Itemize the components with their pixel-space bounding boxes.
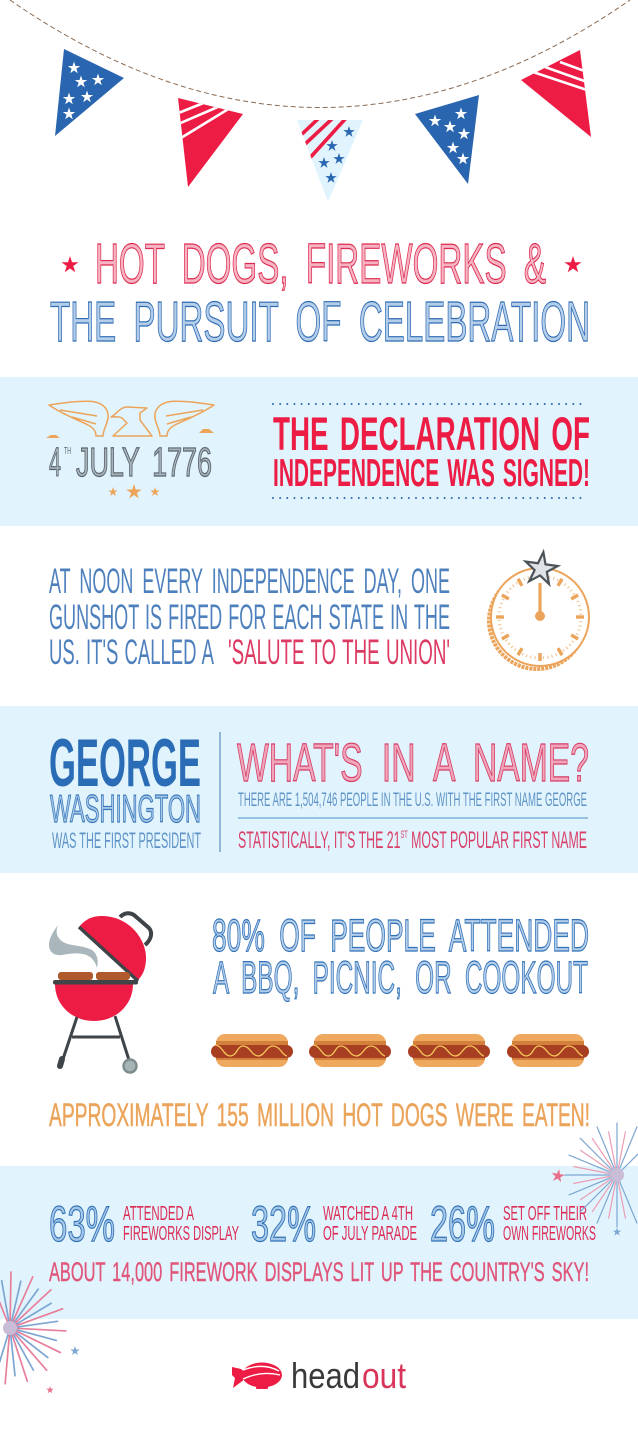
stat: 32%: [251, 1196, 417, 1252]
stat: 63%: FIREWORKS DISPLAY: [123, 1223, 239, 1245]
george washington text: GEORGE: [49, 725, 201, 801]
stars: [108, 484, 160, 498]
bunting string: [10, 0, 630, 108]
icon: grill: [49, 913, 151, 1072]
icon: hot dog 3: [408, 1034, 490, 1067]
title: [50, 232, 590, 354]
decorative stars: [46, 1168, 621, 1393]
stat: 63%: ATTENDED A: [123, 1203, 194, 1225]
stat: 26%: 26%: [430, 1196, 495, 1252]
stat: 32%: 32%: [251, 1196, 316, 1252]
text: noon gunshot fact: [49, 562, 450, 672]
date: 4: [49, 439, 61, 485]
icon: hot dog 1: [211, 1034, 293, 1067]
george washington text: [49, 725, 201, 853]
what's in a name text: ST: [400, 829, 408, 841]
text: noon gunshot fact: US. IT'S CALLED A: [49, 633, 214, 672]
panel: george washington: [0, 706, 638, 873]
flag: blue with stars right: [415, 95, 479, 184]
text: noon gunshot fact: 'SALUTE TO THE UNION': [228, 633, 450, 672]
george washington text: WASHINGTON: [50, 788, 201, 831]
icon: hot dog 4: [507, 1034, 589, 1067]
what's in a name text: STATISTICALLY, IT'S THE 21: [238, 827, 554, 854]
stat: 32%: OF JULY PARADE: [323, 1223, 417, 1245]
icon: clock with star: [489, 550, 589, 669]
what's in a name text: [237, 733, 589, 854]
stat: 26%: [430, 1196, 596, 1252]
icon: blimp: [232, 1362, 282, 1389]
icon: hot dog 2: [309, 1034, 391, 1067]
logo: headout: head: [291, 1355, 360, 1396]
date: TH: [64, 446, 71, 457]
date: JULY 1776: [76, 439, 212, 485]
stat: 32%: WATCHED A 4TH: [323, 1203, 413, 1225]
panel: fireworks stats: [0, 1166, 638, 1319]
flag: light blue with stripes and stars: [297, 117, 363, 202]
panel: george washington: WAS THE FIRST PRESIDENT: [52, 828, 201, 853]
logo: headout: [232, 1355, 406, 1396]
flag: red with stripes: [176, 98, 243, 187]
firework right: [565, 1123, 638, 1227]
declaration text: [273, 404, 590, 498]
firework left: [0, 1272, 66, 1384]
bbq text: [212, 910, 589, 1003]
flag: blue with stars: [55, 49, 124, 136]
flag: red with stripes right: [521, 50, 591, 137]
panel: declaration: [0, 377, 638, 526]
stat: 63%: 63%: [49, 1196, 115, 1252]
icon: eagle: [46, 401, 214, 438]
stat: 63%: [49, 1196, 239, 1252]
logo: headout: out: [362, 1355, 406, 1396]
date: [49, 439, 212, 485]
